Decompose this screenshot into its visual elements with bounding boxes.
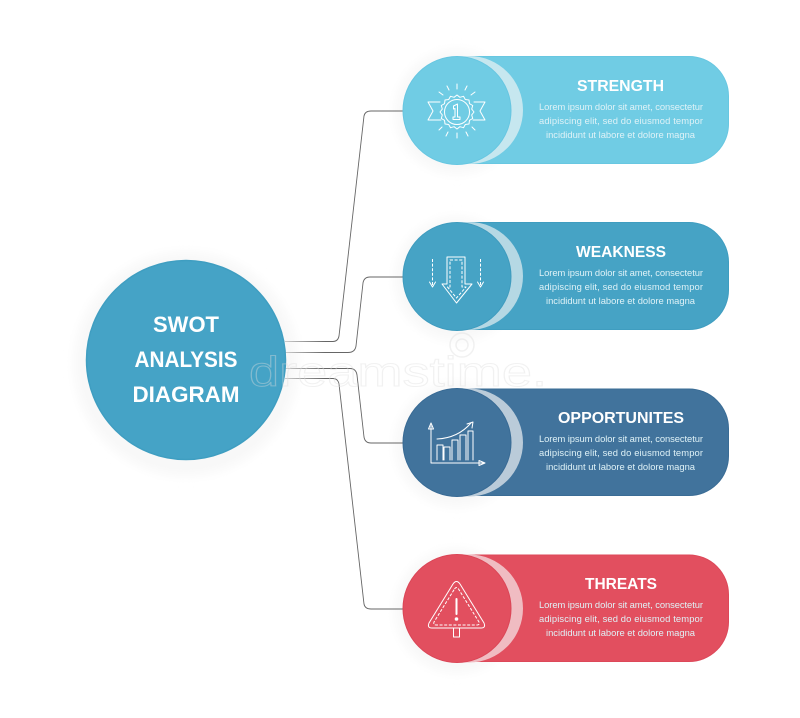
text block: adipiscing elit, sed do eiusmod tempor xyxy=(539,281,703,292)
text block: Lorem ipsum dolor sit amet, consectetur xyxy=(539,599,703,610)
text block: Lorem ipsum dolor sit amet, consectetur xyxy=(539,433,703,444)
icon: growth chart xyxy=(428,422,485,466)
text block: incididunt ut labore et dolore magna xyxy=(546,129,696,140)
central circle xyxy=(86,260,286,460)
text block: incididunt ut labore et dolore magna xyxy=(546,295,696,306)
central title: SWOT xyxy=(153,312,219,337)
central title xyxy=(132,312,240,407)
text block xyxy=(539,599,703,638)
watermark xyxy=(249,333,547,395)
text block xyxy=(539,267,703,306)
watermark: dreamstime. xyxy=(249,348,547,395)
soft halos xyxy=(74,50,519,673)
central title: DIAGRAM xyxy=(132,382,240,407)
text block: incididunt ut labore et dolore magna xyxy=(546,461,696,472)
text block xyxy=(539,101,703,140)
heading: WEAKNESS xyxy=(576,244,666,261)
icon: warning sign xyxy=(428,582,485,637)
panel: strength xyxy=(403,56,728,164)
text block: adipiscing elit, sed do eiusmod tempor xyxy=(539,447,703,458)
heading: THREATS xyxy=(585,576,657,593)
panel: opportunities xyxy=(403,388,728,496)
text block: adipiscing elit, sed do eiusmod tempor xyxy=(539,613,703,624)
text block: Lorem ipsum dolor sit amet, consectetur xyxy=(539,101,703,112)
text block: Lorem ipsum dolor sit amet, consectetur xyxy=(539,267,703,278)
panel: threats xyxy=(403,554,728,662)
text block: adipiscing elit, sed do eiusmod tempor xyxy=(539,115,703,126)
icon: medal xyxy=(428,84,485,138)
connector lines xyxy=(285,111,403,609)
heading: STRENGTH xyxy=(577,78,664,95)
heading: OPPORTUNITES xyxy=(558,410,684,427)
panel: weakness xyxy=(403,222,728,330)
central title: ANALYSIS xyxy=(134,347,238,372)
icon: down arrow xyxy=(430,257,484,303)
text block xyxy=(539,433,703,472)
text block: incididunt ut labore et dolore magna xyxy=(546,627,696,638)
